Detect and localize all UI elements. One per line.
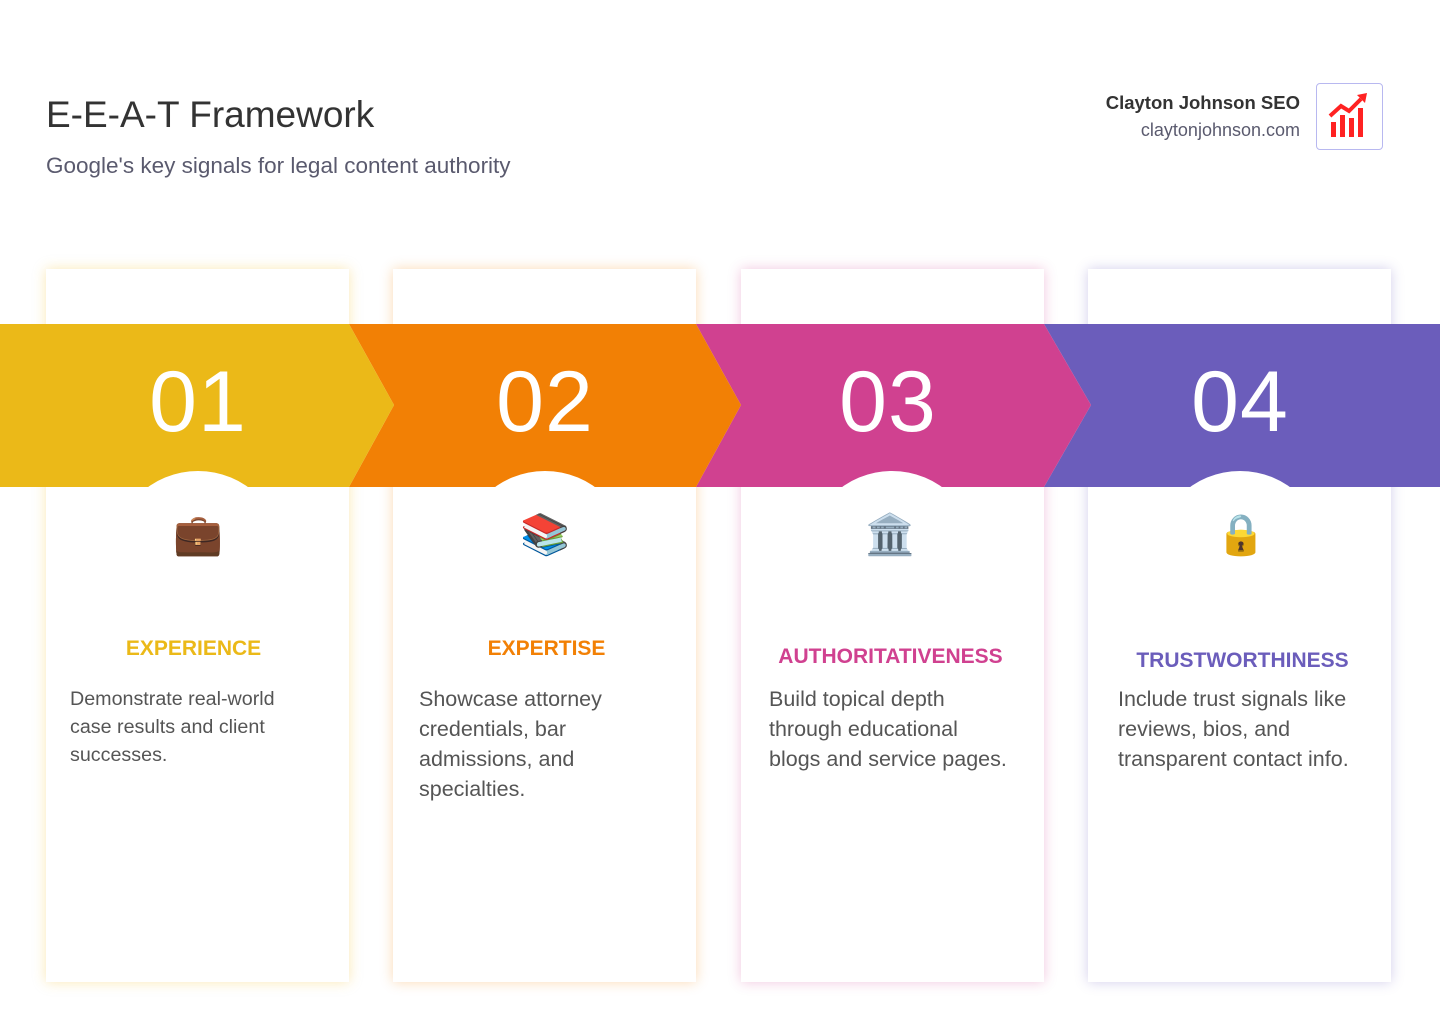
numbers: 01 bbox=[149, 354, 247, 450]
card 4 bbox=[1088, 269, 1391, 982]
text: 04 bbox=[1191, 354, 1289, 450]
heading: authoritativeness: AUTHORITATIVENESS bbox=[778, 645, 1003, 668]
heading: experience: EXPERIENCE bbox=[126, 637, 261, 660]
brand block bbox=[1106, 83, 1383, 150]
icon: building: 🏛 bbox=[865, 511, 915, 558]
icon: logo chart bbox=[1316, 83, 1383, 150]
text: authoritativeness bbox=[769, 687, 1007, 771]
text: expertise: Showcase attorney bbox=[419, 687, 602, 711]
text: 03 bbox=[839, 354, 937, 450]
text: trustworthiness: reviews, bios, and bbox=[1118, 717, 1290, 741]
text: expertise bbox=[419, 687, 602, 801]
text: authoritativeness: blogs and service pages. bbox=[769, 747, 1007, 771]
text: authoritativeness: through educational bbox=[769, 717, 958, 741]
text: 02 bbox=[496, 354, 594, 450]
text: experience: Demonstrate real-world bbox=[70, 688, 275, 710]
arrow band bbox=[0, 324, 1440, 487]
icon: lock: 🔒 bbox=[1216, 511, 1266, 558]
text: trustworthiness bbox=[1118, 687, 1349, 771]
icon: books: 📚 bbox=[520, 511, 570, 558]
brand name: Clayton Johnson SEO bbox=[1106, 92, 1300, 113]
card 2 bbox=[393, 269, 696, 982]
text: expertise: admissions, and bbox=[419, 747, 574, 771]
text: authoritativeness: Build topical depth bbox=[769, 687, 945, 711]
circles bbox=[112, 471, 284, 643]
heading: expertise: EXPERTISE bbox=[488, 637, 605, 660]
card 3 bbox=[741, 269, 1044, 982]
card 1 bbox=[46, 269, 349, 982]
text: trustworthiness: Include trust signals like bbox=[1118, 687, 1346, 711]
text: experience bbox=[70, 688, 275, 766]
text: trustworthiness: transparent contact info. bbox=[1118, 747, 1349, 771]
title: E-E-A-T Framework bbox=[46, 94, 374, 135]
icon: briefcase: 💼 bbox=[173, 511, 223, 558]
heading: trustworthiness: TRUSTWORTHINESS bbox=[1136, 649, 1349, 672]
subtitle: Google's key signals for legal content authority bbox=[46, 153, 511, 178]
text: expertise: specialties. bbox=[419, 777, 525, 801]
text: experience: case results and client bbox=[70, 716, 265, 738]
text: experience: successes. bbox=[70, 744, 167, 766]
text: expertise: credentials, bar bbox=[419, 717, 566, 741]
brand url: claytonjohnson.com bbox=[1141, 120, 1300, 140]
